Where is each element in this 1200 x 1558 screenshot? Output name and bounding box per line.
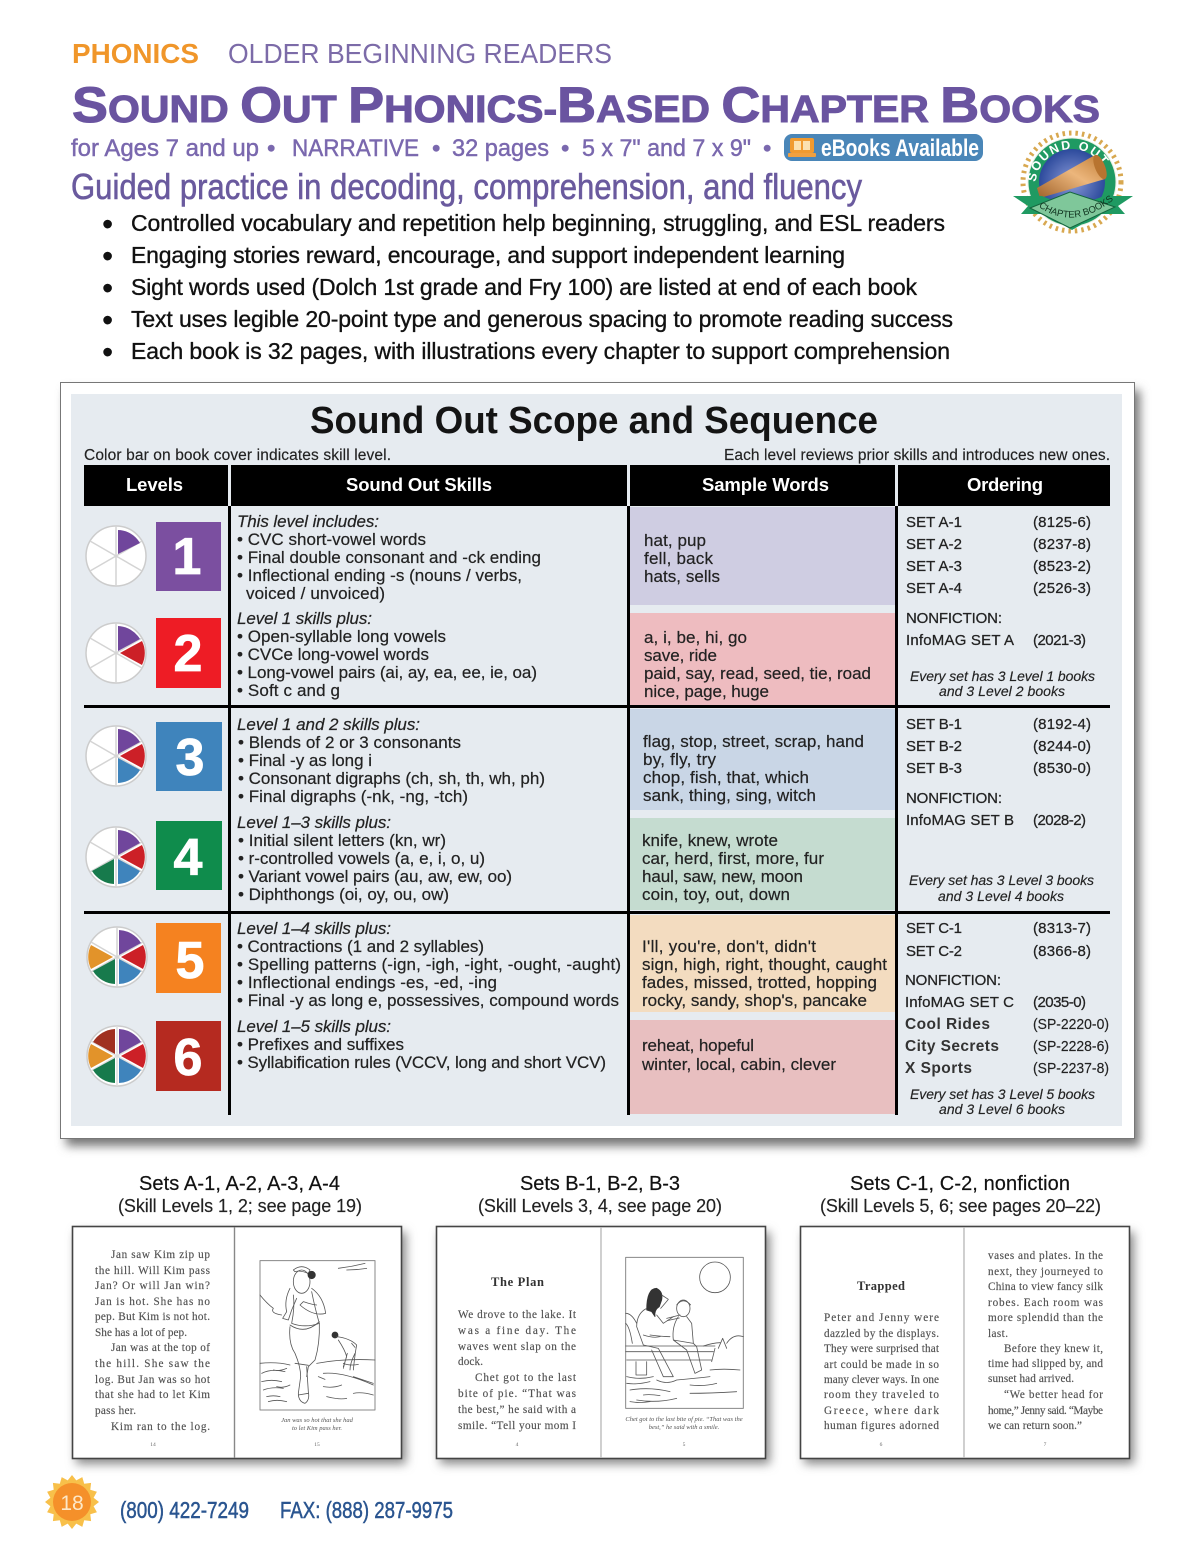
right page text: Before they knew it, <box>1004 1343 1103 1355</box>
ordering: levels 3 and 4: SET B-2 <box>906 738 962 755</box>
left page text: Greece, where dark <box>824 1405 939 1417</box>
ordering: levels 1 and 2: SET A-3 <box>906 558 962 575</box>
ordering: levels 1 and 2: (8237-8) <box>1033 536 1091 553</box>
page text: the hill. She saw the <box>95 1358 210 1370</box>
chart note left: Color bar on book cover indicates skill level. <box>84 447 391 464</box>
category heading: OLDER BEGINNING READERS <box>228 38 612 69</box>
table header: Levels <box>126 474 183 495</box>
level 5 pie icon <box>87 927 147 987</box>
product details line: 5 x 7" and 7 x 9" <box>582 135 751 162</box>
level 4 skills: • Initial silent letters (kn, wr) <box>238 831 446 850</box>
level 5 skills: • Inflectional endings -es, -ed, -ing <box>237 973 497 992</box>
level 4 pie icon <box>86 827 146 887</box>
level 1 sample words: hats, sells <box>644 567 720 586</box>
level 2 number: 2 <box>174 625 202 683</box>
illustration caption: best,” he said with a smile. <box>649 1424 720 1431</box>
ordering: levels 1 and 2: SET A-4 <box>906 580 962 597</box>
level 5 sample words: rocky, sandy, shop's, pancake <box>642 991 867 1010</box>
ordering: levels 5 and 6: (8366-8) <box>1033 943 1091 960</box>
ordering: levels 1 and 2: Every set has 3 Level 1 books <box>910 668 1095 684</box>
book spread: sets B <box>436 1226 770 1464</box>
page text: smile. “Tell your mom I <box>458 1420 576 1432</box>
illustration caption <box>625 1416 743 1448</box>
level 3 number <box>156 722 222 791</box>
caption: sets C: (Skill Levels 5, 6; see pages 20–22) <box>820 1196 1101 1216</box>
page text: She has a lot of pep. <box>95 1327 187 1339</box>
level 4 sample words: haul, saw, new, moon <box>642 867 803 886</box>
ordering: levels 5 and 6 <box>905 920 1109 1117</box>
badge: eBooks available: eBooks Available <box>821 135 979 162</box>
product details line: • <box>561 135 569 162</box>
level 5 sample words <box>642 937 887 1010</box>
caption: sets B: (Skill Levels 3, 4, see page 20) <box>478 1196 722 1216</box>
level 3 number: 3 <box>176 729 204 787</box>
level 3 sample words: by, fly, try <box>643 750 716 769</box>
ordering: levels 5 and 6: NONFICTION: <box>905 972 1001 989</box>
level 3 skills: Level 1 and 2 skills plus: <box>237 715 420 734</box>
feature bullet list: Controlled vocabulary and repetition help beginning, struggling, and ESL readers <box>131 210 945 236</box>
level 3 sample words: chop, fish, that, which <box>643 768 809 787</box>
level 4 sample words: car, herd, first, more, fur <box>642 849 824 868</box>
icon: Sound Out Chapter Books medal: CHAPTER BOOKS <box>1040 196 1112 218</box>
level 6 sample words: reheat, hopeful <box>642 1036 754 1055</box>
ordering: levels 1 and 2: SET A-2 <box>906 536 962 553</box>
page text: bite of pie. “That was <box>458 1388 576 1400</box>
page text: was a fine day. The <box>458 1325 576 1337</box>
illustration caption: to let Kim pass her. <box>292 1425 342 1432</box>
level 5 skills <box>237 919 621 1010</box>
level 4 sample words <box>642 831 824 904</box>
page text: Jan is hot. She has no <box>95 1296 210 1308</box>
illustration caption <box>281 1417 354 1448</box>
fax number: FAX: (888) 287-9975 <box>280 1497 453 1523</box>
category heading <box>72 38 612 69</box>
page text: waves went slap on the <box>458 1341 576 1353</box>
level 6 skills <box>237 1017 606 1072</box>
feature bullet list: Text uses legible 20-point type and generous spacing to promote reading success <box>131 306 953 332</box>
subheading: Guided practice in decoding, comprehension, and fluency <box>71 166 862 207</box>
page number sun badge: 18 <box>60 1492 84 1515</box>
right page text: time had slipped by, and <box>988 1358 1103 1370</box>
right page text: more splendid than the <box>988 1312 1103 1324</box>
left page text: dazzled by the displays. <box>824 1328 939 1340</box>
product details line: for Ages 7 and up <box>71 135 259 162</box>
level 2 sample words: nice, page, huge <box>644 682 769 701</box>
page text: Jan saw Kim zip up <box>111 1249 210 1261</box>
level 4 sample words: coin, toy, out, down <box>642 885 790 904</box>
level 2 number <box>156 618 221 688</box>
illustration caption: Chet got to the last bite of pie. “That was the <box>625 1416 743 1423</box>
badge: eBooks available <box>784 134 983 162</box>
level 6 pie icon <box>87 1026 147 1086</box>
ordering: levels 5 and 6: (8313-7) <box>1033 920 1091 937</box>
level 4 sample words: knife, knew, wrote <box>642 831 778 850</box>
level 1 number <box>156 522 221 591</box>
illustration caption: 15 <box>314 1442 320 1448</box>
ordering: levels 5 and 6: SET C-2 <box>906 943 962 960</box>
page text: The Plan <box>491 1275 544 1289</box>
caption: sets A: Sets A-1, A-2, A-3, A-4 <box>139 1173 340 1195</box>
level 1 skills: This level includes: <box>237 512 379 531</box>
page text: pep. But Kim is not hot. <box>95 1311 210 1323</box>
page text: that she had to let Kim <box>95 1389 210 1401</box>
left page text: human figures adorned <box>824 1420 939 1432</box>
level 3 pie icon <box>86 726 146 786</box>
ordering: levels 5 and 6: (SP-2228-6) <box>1033 1039 1109 1055</box>
icon: laptop book <box>788 138 816 157</box>
right page text: vases and plates. In the <box>988 1250 1103 1262</box>
phone number: (800) 422-7249 <box>120 1497 249 1523</box>
ordering: levels 1 and 2: SET A-1 <box>906 514 962 531</box>
ordering: levels 5 and 6: (SP-2237-8) <box>1033 1061 1109 1077</box>
ordering: levels 3 and 4: SET B-1 <box>906 716 962 733</box>
illustration: runner <box>260 1261 375 1410</box>
level 4 skills <box>237 813 512 904</box>
level 1 skills: • CVC short-vowel words <box>237 530 426 549</box>
sample word colour blocks <box>630 507 895 1114</box>
level 2 skills: Level 1 skills plus: <box>237 609 372 628</box>
ordering: levels 3 and 4: NONFICTION: <box>906 790 1002 807</box>
level 3 skills: • Final digraphs (-nk, -ng, -tch) <box>238 787 468 806</box>
feature bullet list: • <box>102 206 113 242</box>
ordering: levels 5 and 6: and 3 Level 6 books <box>939 1101 1065 1117</box>
page text <box>95 1249 211 1448</box>
product details line: • <box>432 135 440 162</box>
illustration caption: Jan was so hot that she had <box>281 1417 354 1424</box>
level 4 number <box>156 821 222 890</box>
level 1 number: 1 <box>173 528 201 586</box>
book spread: sets C <box>800 1226 1134 1464</box>
caption: sets A: (Skill Levels 1, 2; see page 19) <box>118 1196 362 1216</box>
level 6 sample words: winter, local, cabin, clever <box>641 1055 836 1074</box>
page text: We drove to the lake. It <box>458 1309 577 1321</box>
page text: the hill. Will Kim pass <box>95 1265 210 1277</box>
table header: Sample Words <box>702 474 829 495</box>
level 3 skills: • Final -y as long i <box>238 751 372 770</box>
page text: 4 <box>516 1442 519 1448</box>
panel: scope and sequence chart <box>60 382 1140 1146</box>
ordering: levels 5 and 6: (2035-0) <box>1033 994 1086 1011</box>
level 2 sample words: save, ride <box>644 646 717 665</box>
level 2 sample words <box>644 628 871 701</box>
level 6 skills: Level 1–5 skills plus: <box>237 1017 391 1036</box>
caption: sets C <box>820 1173 1101 1216</box>
feature bullet list: • <box>102 334 113 370</box>
level 4 skills: • Diphthongs (oi, oy, ou, ow) <box>238 885 449 904</box>
level 3 skills: • Blends of 2 or 3 consonants <box>238 733 461 752</box>
ordering: levels 5 and 6: Every set has 3 Level 5 books <box>910 1086 1095 1102</box>
feature bullet list: Each book is 32 pages, with illustrations every chapter to support comprehension <box>131 338 950 364</box>
page text: Kim ran to the log. <box>111 1421 210 1433</box>
ordering: levels 3 and 4: SET B-3 <box>906 760 962 777</box>
left page text: 6 <box>880 1442 883 1448</box>
page text: Jan? Or will Jan win? <box>95 1280 210 1292</box>
level 1 sample words: hat, pup <box>644 531 706 550</box>
level 6 skills: • Syllabification rules (VCCV, long and short VCV) <box>237 1053 606 1072</box>
ordering: levels 1 and 2: (8523-2) <box>1033 558 1091 575</box>
caption: sets A <box>118 1173 362 1216</box>
page text: log. But Jan was so hot <box>95 1374 211 1386</box>
level 1 pie icon <box>86 526 146 586</box>
page number sun badge <box>45 1475 99 1529</box>
page text: Jan was at the top of <box>111 1342 210 1354</box>
level 2 skills: • Soft c and g <box>237 681 340 700</box>
level 2 pie icon <box>86 623 146 683</box>
level 1 sample words: fell, back <box>644 549 714 568</box>
ordering: levels 1 and 2: NONFICTION: <box>906 610 1002 627</box>
right page text: China to view fancy silk <box>988 1281 1103 1293</box>
ordering: levels 3 and 4: Every set has 3 Level 3 books <box>909 872 1094 888</box>
ordering: levels 1 and 2 <box>906 514 1095 699</box>
table header: Ordering <box>967 474 1043 495</box>
level 1 skills <box>237 512 541 603</box>
level 5 sample words: sign, high, right, thought, caught <box>642 955 887 974</box>
level 5 skills: Level 1–4 skills plus: <box>237 919 391 938</box>
ordering: levels 5 and 6: X Sports <box>905 1060 972 1077</box>
level 3 sample words <box>643 732 864 805</box>
page text: the best,” he said with a <box>458 1404 576 1416</box>
page text: Chet got to the last <box>475 1372 577 1384</box>
level 6 sample words <box>641 1036 836 1074</box>
icon: Sound Out Chapter Books medal: SOUND OUT <box>1028 141 1110 182</box>
level 5 skills: • Contractions (1 and 2 syllables) <box>237 937 484 956</box>
left page text: room they traveled to <box>824 1389 939 1401</box>
feature bullet list: Engaging stories reward, encourage, and support independent learning <box>131 242 845 268</box>
right page text: “We better head for <box>1004 1389 1103 1401</box>
feature bullet list: Sight words used (Dolch 1st grade and Fry 100) are listed at end of each book <box>131 274 918 300</box>
table header <box>84 465 1110 506</box>
ordering: levels 3 and 4: (2028-2) <box>1033 812 1086 829</box>
right page text: last. <box>988 1328 1008 1340</box>
ordering: levels 5 and 6: SET C-1 <box>906 920 962 937</box>
level 3 sample words: flag, stop, street, scrap, hand <box>643 732 864 751</box>
left page text: They were surprised that <box>824 1343 940 1355</box>
table header: Sound Out Skills <box>346 474 492 495</box>
ordering: levels 5 and 6: (SP-2220-0) <box>1033 1017 1109 1033</box>
feature bullet list: • <box>102 270 113 306</box>
ordering: levels 3 and 4: InfoMAG SET B <box>906 812 1014 829</box>
level 4 number: 4 <box>174 829 203 887</box>
level 5 number <box>156 923 221 993</box>
caption: sets B: Sets B-1, B-2, B-3 <box>520 1173 680 1195</box>
level 1 skills: • Final double consonant and -ck ending <box>237 548 541 567</box>
chart note right: Each level reviews prior skills and introduces new ones. <box>724 447 1110 464</box>
caption: sets B <box>478 1173 722 1216</box>
level 2 skills <box>237 609 537 700</box>
left page text: art could be made in so <box>824 1359 939 1371</box>
level 2 skills: • Open-syllable long vowels <box>237 627 446 646</box>
caption: sets C: Sets C-1, C-2, nonfiction <box>850 1173 1070 1195</box>
ordering: levels 3 and 4: and 3 Level 4 books <box>938 888 1064 904</box>
level 4 skills: • r-controlled vowels (a, e, i, o, u) <box>238 849 485 868</box>
icon: Sound Out Chapter Books medal <box>1013 130 1133 234</box>
product details line: • <box>267 135 275 162</box>
right page text <box>988 1250 1103 1448</box>
title: SOUND OUT PHONICS- BASED CHAPTER BOOKS <box>72 77 1100 133</box>
ordering: levels 3 and 4: (8530-0) <box>1033 760 1091 777</box>
ordering: levels 5 and 6: InfoMAG SET C <box>905 994 1014 1011</box>
level 1 skills: voiced / unvoiced) <box>246 584 385 603</box>
level 2 sample words: paid, say, read, seed, tie, road <box>644 664 871 683</box>
feature bullet list: • <box>102 238 113 274</box>
page text <box>458 1275 577 1448</box>
product details line: • <box>763 135 771 162</box>
ordering: levels 1 and 2: (2526-3) <box>1033 580 1091 597</box>
right page text: sunset had arrived. <box>988 1373 1074 1385</box>
illustration: dock and moon <box>626 1257 743 1408</box>
product details line: 32 pages <box>452 135 549 162</box>
level 2 skills: • Long-vowel pairs (ai, ay, ea, ee, ie, oa) <box>237 663 537 682</box>
ordering: levels 1 and 2: (8125-6) <box>1033 514 1091 531</box>
level 1 skills: • Inflectional ending -s (nouns / verbs, <box>237 566 522 585</box>
chart title: Sound Out Scope and Sequence <box>310 400 878 442</box>
left page text: many clever ways. In one <box>824 1374 939 1386</box>
book spread: sets A <box>72 1226 406 1464</box>
ordering: levels 3 and 4: (8244-0) <box>1033 738 1091 755</box>
level 5 skills: • Final -y as long e, possessives, compound words <box>237 991 619 1010</box>
ordering: levels 1 and 2: InfoMAG SET A <box>906 632 1014 649</box>
ordering: levels 3 and 4: (8192-4) <box>1033 716 1091 733</box>
level 3 skills: • Consonant digraphs (ch, sh, th, wh, ph) <box>238 769 545 788</box>
level 6 number <box>156 1021 221 1091</box>
level 5 sample words: I'll, you're, don't, didn't <box>642 937 816 956</box>
ordering: levels 1 and 2: and 3 Level 2 books <box>939 683 1065 699</box>
level 6 skills: • Prefixes and suffixes <box>237 1035 404 1054</box>
ordering: levels 5 and 6: City Secrets <box>905 1038 999 1055</box>
level 5 skills: • Spelling patterns (-ign, -igh, -ight, -ought, -aught) <box>237 955 621 974</box>
level 5 sample words: fades, missed, trotted, hopping <box>642 973 877 992</box>
level 6 number: 6 <box>174 1029 202 1087</box>
right page text: we can return soon.” <box>988 1420 1082 1432</box>
feature bullet list: • <box>102 302 113 338</box>
left page text: Trapped <box>857 1279 905 1293</box>
illustration caption: 5 <box>683 1442 686 1448</box>
right page text: 7 <box>1044 1442 1047 1448</box>
right page text: robes. Each room was <box>988 1297 1103 1309</box>
ordering: levels 1 and 2: (2021-3) <box>1033 632 1086 649</box>
level 2 sample words: a, i, be, hi, go <box>644 628 747 647</box>
level 2 skills: • CVCe long-vowel words <box>237 645 429 664</box>
category heading: PHONICS <box>72 38 199 69</box>
level 5 number: 5 <box>176 932 204 990</box>
level 4 skills: • Variant vowel pairs (au, aw, ew, oo) <box>238 867 512 886</box>
ordering: levels 3 and 4 <box>906 716 1094 904</box>
product details line: NARRATIVE <box>292 135 419 162</box>
left page text: Peter and Jenny were <box>824 1312 939 1324</box>
page text: 14 <box>150 1442 156 1448</box>
level 4 skills: Level 1–3 skills plus: <box>237 813 391 832</box>
feature bullet list <box>102 206 953 370</box>
level 1 sample words <box>644 531 720 586</box>
right page text: home,” Jenny said. “Maybe <box>988 1405 1103 1417</box>
right page text: next, they journeyed to <box>988 1266 1103 1278</box>
level 3 sample words: sank, thing, sing, witch <box>643 786 816 805</box>
product details line <box>71 135 771 162</box>
level 3 skills <box>237 715 545 806</box>
ordering: levels 5 and 6: Cool Rides <box>905 1016 990 1033</box>
page text: pass her. <box>95 1405 136 1417</box>
page text: dock. <box>458 1356 483 1368</box>
left page text <box>824 1279 940 1448</box>
